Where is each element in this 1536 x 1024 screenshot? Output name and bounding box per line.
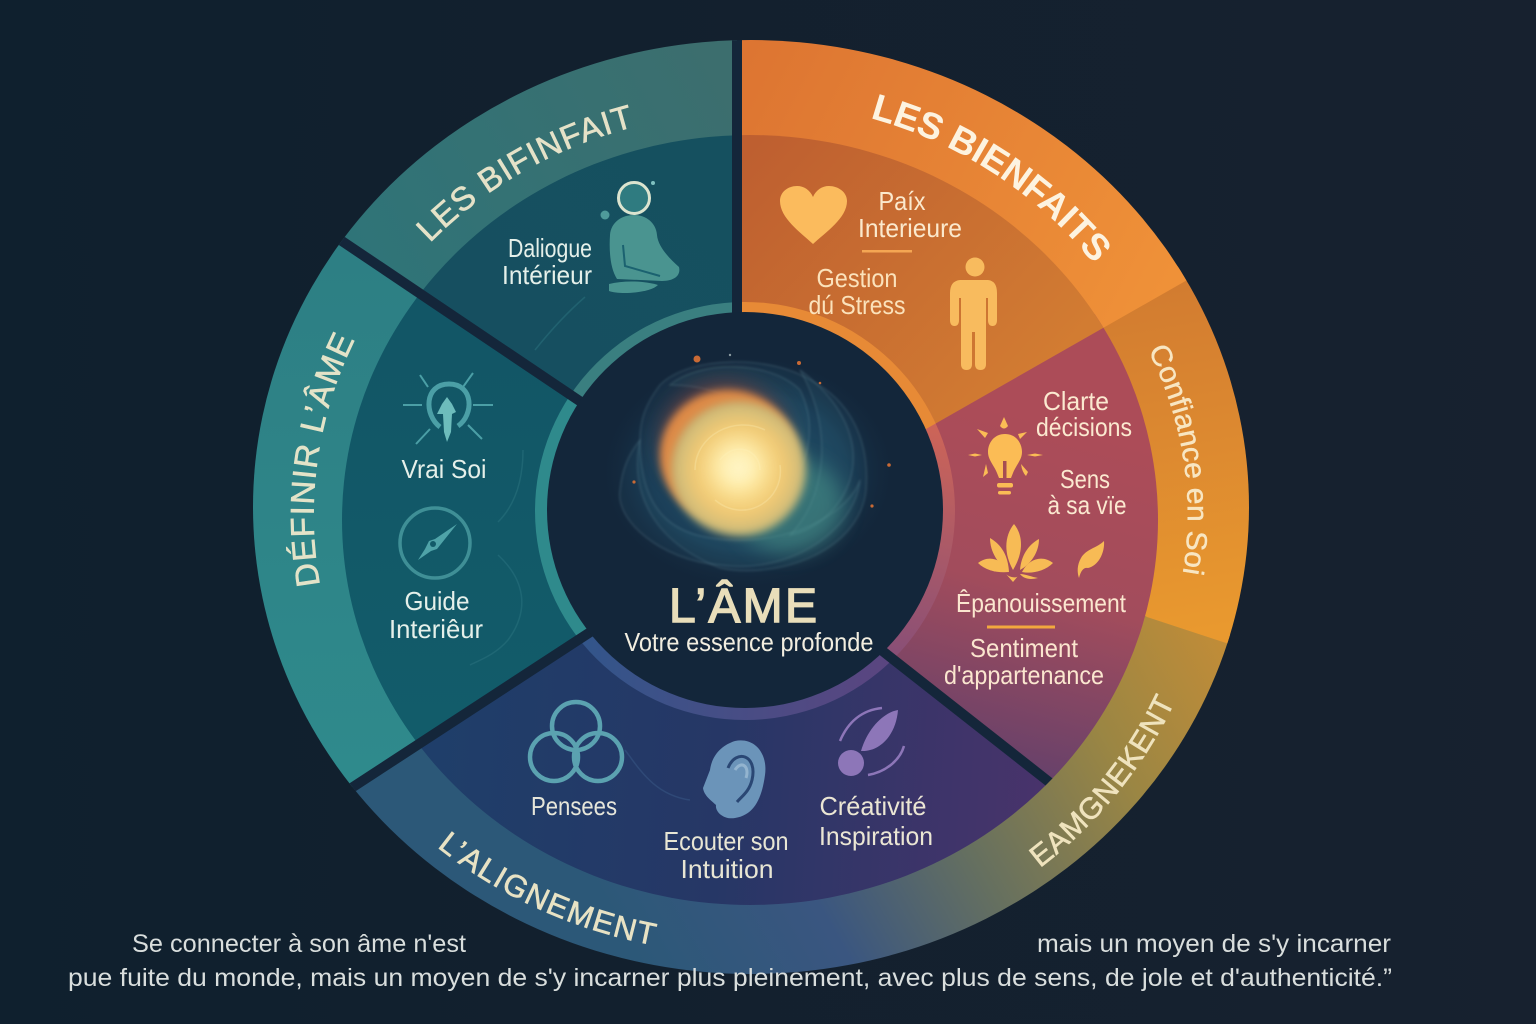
text: sens a sa vie [1048, 464, 1126, 520]
text: sentiment d'appartenance: d'appartenance [944, 660, 1104, 690]
text: creativite inspiration: Inspiration [819, 821, 933, 851]
subheading: votre essence profonde: Votre essence profonde [624, 627, 874, 657]
outer band: bottom blue to olive [352, 616, 1230, 974]
panel content: alignement [530, 702, 933, 884]
inner ring: orange [742, 302, 936, 429]
inner ring: left [535, 399, 586, 636]
icon: leaf and seed [838, 708, 904, 776]
text: gestion du stress: Gestion [816, 263, 898, 293]
text: gestion du stress: dú Stress [808, 290, 906, 320]
text: ecouter son intuition: Intuition [680, 854, 774, 884]
inner ring: bottom [582, 636, 890, 720]
icon: glowing soul orb [598, 352, 898, 592]
panel content: les bienfaits [780, 186, 997, 370]
text: guide interieur: Guide [404, 586, 470, 616]
separator [862, 250, 912, 252]
text: creativite inspiration [819, 791, 933, 851]
icon: lotus [978, 524, 1053, 582]
icon: compass [400, 508, 470, 578]
text: pensees: Pensees [531, 791, 617, 821]
quote line 2: pue fuite du monde, mais un moyen de s'y incarner plus pleinement, avec plus de sens, de jole et d'authenticité.” [68, 964, 1392, 992]
quote line 1 right: mais un moyen de s'y incarner [1037, 930, 1391, 958]
icon: meditating figure [600, 181, 679, 293]
text: daliogue interieur: Daliogue [508, 233, 592, 263]
icon: head with ear [703, 740, 765, 818]
panel content: confiance en soi [944, 386, 1132, 690]
text: ecouter son intuition [664, 826, 788, 884]
text: clarte decisions: décisions [1036, 412, 1132, 442]
text: paix interieure [858, 186, 962, 243]
text: creativite inspiration: Créativité [820, 791, 926, 821]
text: vrai soi: Vrai Soi [402, 454, 486, 484]
icon: person [950, 258, 997, 370]
icon: light bulb [968, 417, 1043, 494]
infographic: soul wheel [70, 40, 1391, 991]
text: guide interieur: Interiêur [389, 614, 483, 644]
panel content: dialogue intérieur [502, 181, 679, 293]
text: daliogue interieur [502, 233, 592, 290]
inner ring: top left [573, 302, 732, 397]
text: sens a sa vie: à sa vïe [1048, 490, 1126, 520]
outer band: right amber [1104, 266, 1249, 644]
band label: les bienfaits: LES BIENFAITS [872, 94, 1110, 260]
icon: flame leaf [1078, 541, 1104, 578]
inner panel: left teal [342, 298, 576, 740]
band label: définir l'âme: DÉFINIR L’ÂME [286, 332, 355, 586]
text: epanouissement: Êpanouissement [956, 588, 1127, 618]
text: paix interieure: Interieure [858, 213, 962, 243]
inner panel: orange [742, 135, 1104, 424]
heading: l'âme: L’ÂME [669, 580, 817, 633]
centre disc [547, 312, 943, 708]
text: sentiment d'appartenance: Sentiment [970, 633, 1079, 663]
panel content: définir l'âme [389, 373, 493, 644]
divider lines [330, 30, 1058, 802]
text: sens a sa vie: Sens [1060, 464, 1110, 494]
band label: l'alignement: L’ALIGNEMENT [438, 831, 658, 944]
inner panel: top left teal [423, 136, 732, 390]
swoosh accents [470, 297, 690, 800]
text: paix interieure: Paíx [878, 186, 926, 216]
text: clarte decisions [1036, 386, 1132, 442]
outer band: top orange [742, 40, 1186, 328]
text: sentiment d'appartenance [944, 633, 1104, 690]
band label: confiance en soi: Confiance en Soi [1151, 346, 1208, 575]
quote [68, 930, 1392, 992]
text: guide interieur [389, 586, 483, 644]
outer band: left teal [253, 240, 417, 787]
separator [987, 626, 1055, 628]
band label: les bifinfait: LES BIFINFAIT [416, 104, 629, 242]
text: gestion du stress [808, 263, 906, 320]
inner panel: rose [896, 314, 1158, 782]
icon: radiant inner self [403, 373, 493, 444]
quote line 1 left: Se connecter à son âme n'est [132, 930, 466, 958]
band label: eamgnekent: EAMGNEKENT [1028, 692, 1172, 867]
icon: heart [780, 186, 847, 244]
outer band: top left teal [342, 40, 737, 290]
icon: three linked rings [530, 702, 622, 781]
text: daliogue interieur: Intérieur [502, 260, 592, 290]
inner ring: rose [887, 410, 955, 656]
text: ecouter son intuition: Ecouter son [664, 826, 788, 856]
inner panel: bottom blue violet [422, 643, 1049, 905]
text: clarte decisions: Clarte [1043, 386, 1109, 416]
